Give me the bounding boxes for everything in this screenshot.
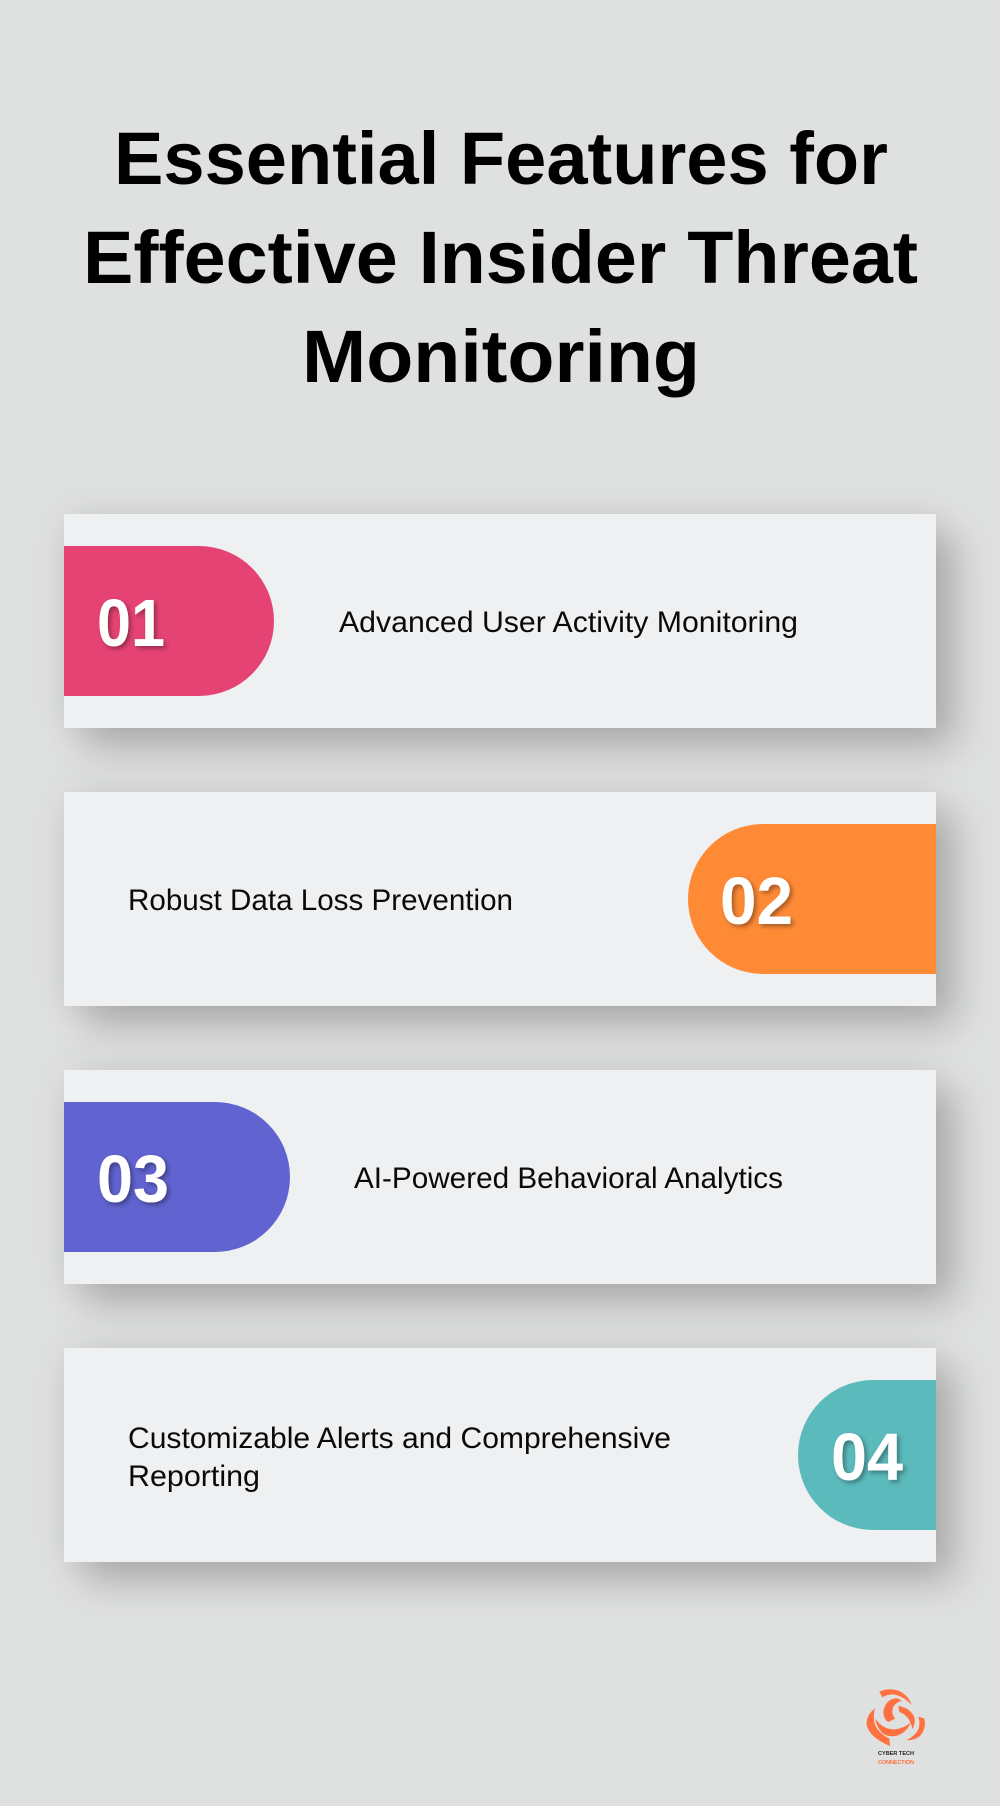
panel: feature 01 [64,514,936,728]
number badge 04: 04 [831,1420,903,1495]
number badge 01 [64,546,274,696]
logo wordmark [878,1751,914,1766]
feature text 04 [128,1422,671,1493]
number badge 04 [798,1380,936,1530]
title [83,117,918,398]
feature text 01: Advanced User Activity Monitoring [339,606,798,639]
feature text 03: AI-Powered Behavioral Analytics [354,1162,783,1195]
number badge 03: 03 [97,1142,169,1217]
panel: feature 03 [64,1070,936,1284]
number badge 03 [64,1102,290,1252]
panel: feature 04 [64,1348,936,1562]
feature text 04: Customizable Alerts and Comprehensive [128,1422,671,1455]
panel: feature 02 [64,792,936,1006]
logo wordmark: CONNECTION [878,1760,914,1766]
logo [867,1689,925,1766]
feature text 04: Reporting [128,1460,260,1493]
number badge 01: 01 [97,586,165,661]
logo wordmark: CYBER TECH [878,1751,914,1757]
number badge 02: 02 [720,864,793,939]
feature text 02: Robust Data Loss Prevention [128,884,513,917]
title: Monitoring [302,315,700,398]
title: Essential Features for [114,117,888,200]
title: Effective Insider Threat [83,216,918,299]
number badge 02 [688,824,936,974]
icon: triskelion [867,1689,925,1746]
